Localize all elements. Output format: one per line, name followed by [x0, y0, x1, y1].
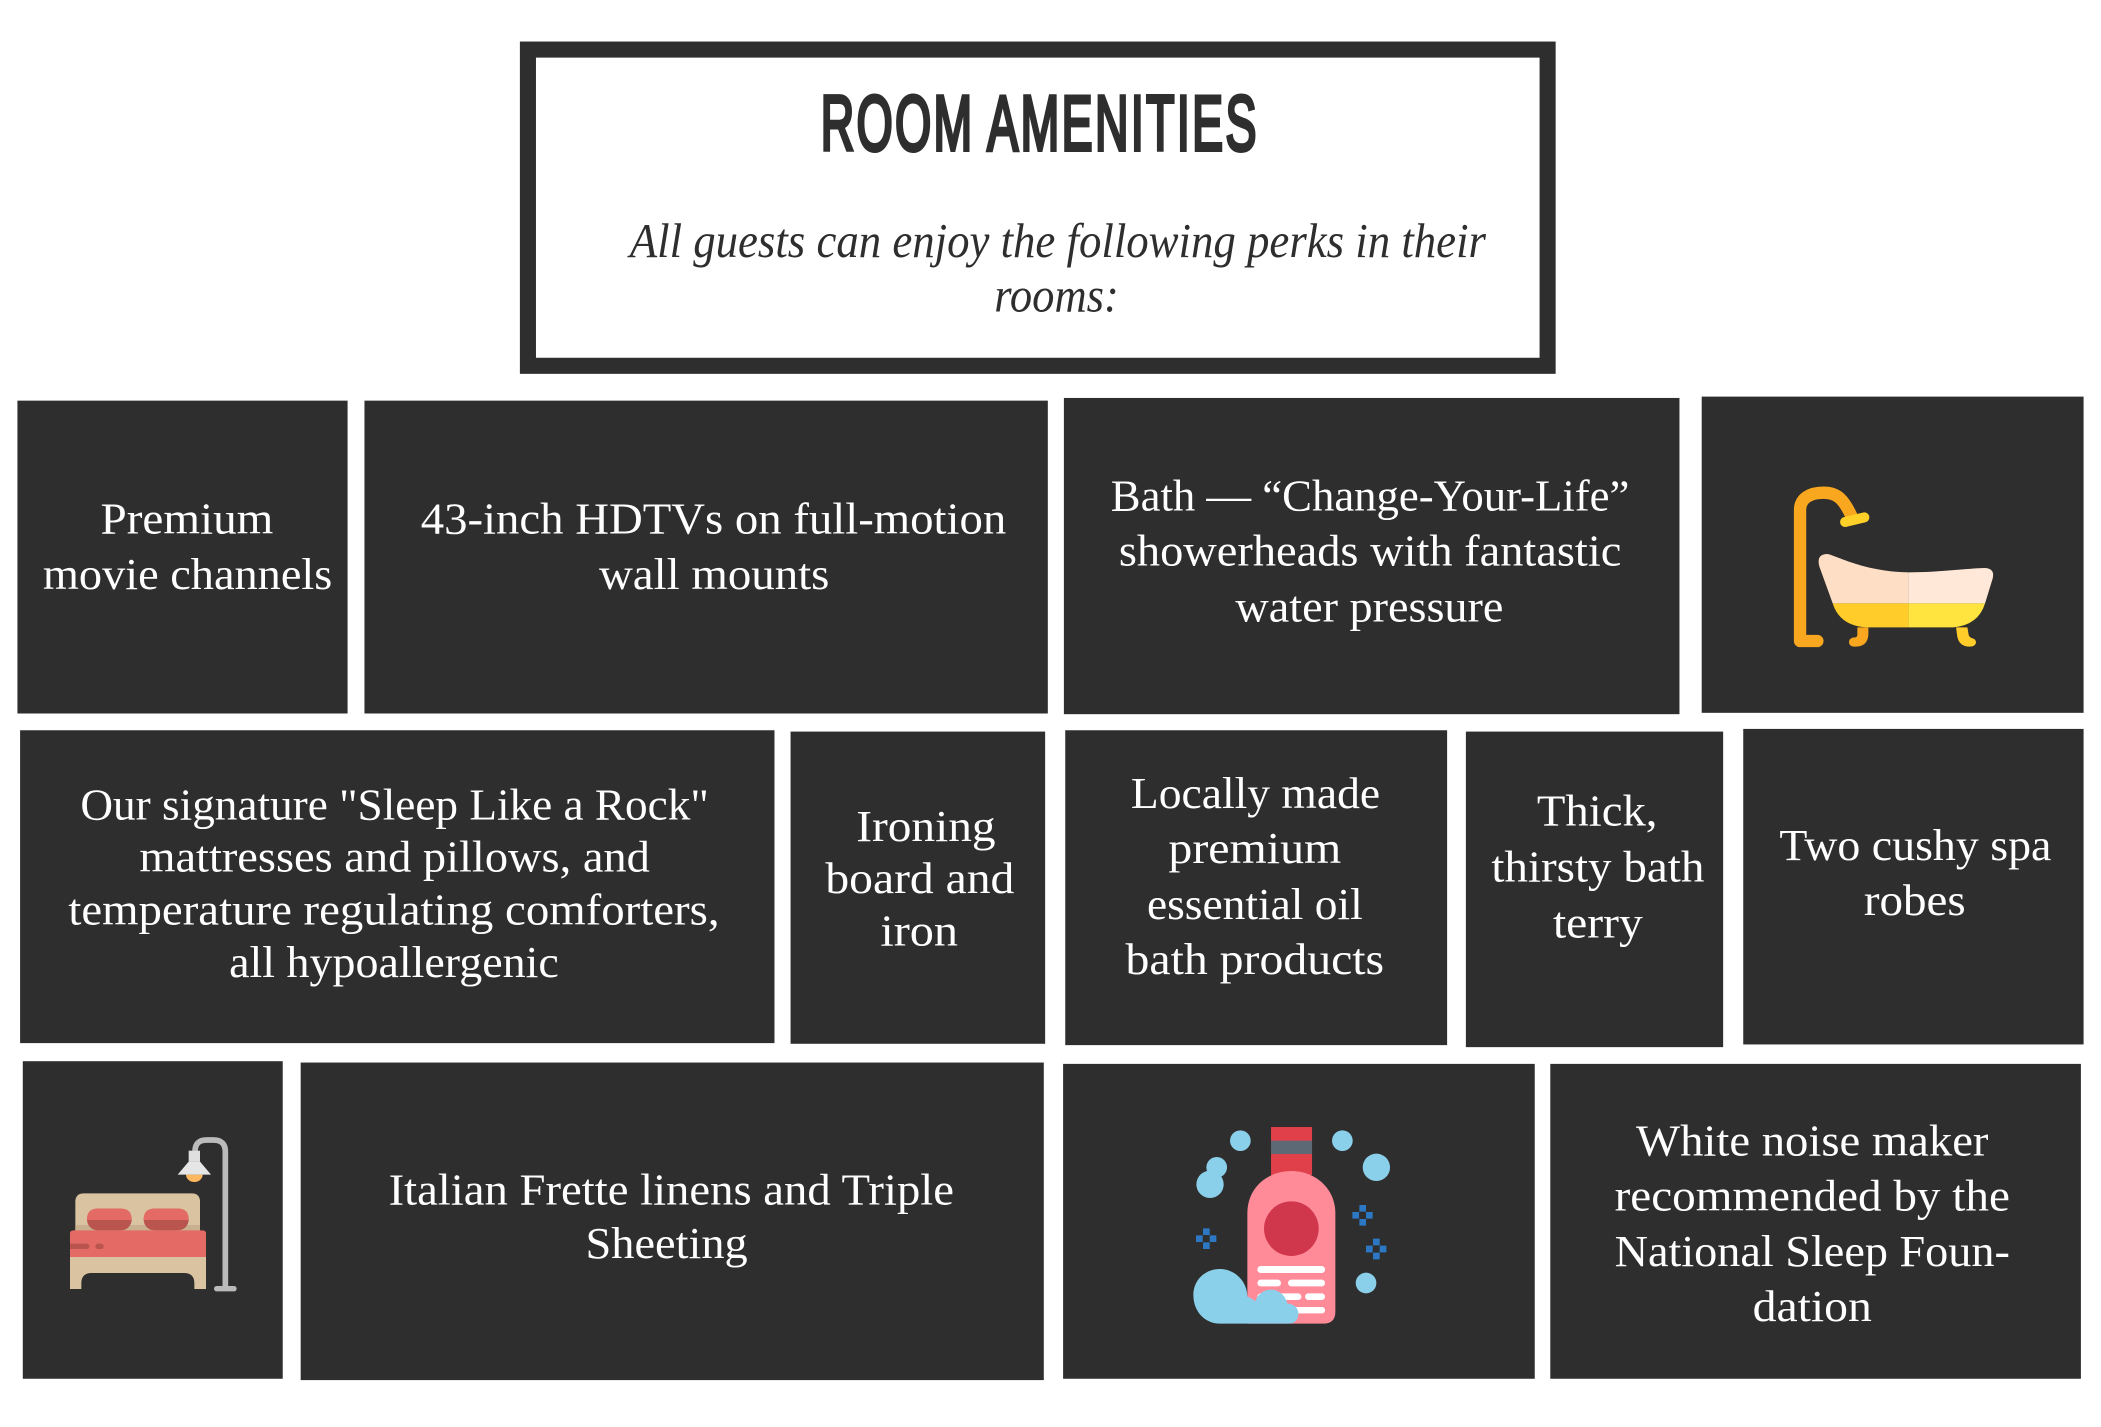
panel: HDTVs: wall mounts: [599, 550, 829, 599]
panel: bath products: bath products: [1126, 935, 1384, 984]
subtitle: All guests can enjoy the following perks in their: [627, 215, 1486, 268]
icon: bath bottle and bubbles: [1193, 1127, 1390, 1324]
panel: spa robes: [1743, 729, 2084, 1044]
panel: bath showerheads: [1064, 398, 1679, 714]
panel: white noise maker: recommended by the: [1615, 1171, 2010, 1220]
panel: bath showerheads: Bath — “Change-Your-Life”: [1111, 472, 1629, 521]
panel: signature mattresses: all hypoallergenic: [229, 938, 559, 987]
panel: signature mattresses: [20, 730, 774, 1043]
panel: ironing board: [791, 732, 1045, 1044]
panel: premium movie channels: Premium: [100, 494, 273, 543]
panel: HDTVs: 43-inch HDTVs on full-motion: [421, 494, 1006, 543]
panel: bath terry: Thick,: [1537, 786, 1657, 835]
panel: spa robes: robes: [1864, 876, 1966, 925]
panel: bathtub icon: [1702, 397, 2084, 713]
panel: white noise maker: National Sleep Foun-: [1615, 1227, 2010, 1276]
panel: premium movie channels: movie channels: [43, 550, 332, 599]
panel: white noise maker: dation: [1753, 1282, 1872, 1331]
panel: bath showerheads: showerheads with fantastic: [1119, 526, 1621, 575]
panel: Italian linens: [301, 1063, 1044, 1380]
panel: premium movie channels: [17, 401, 348, 714]
panel: ironing board: Ironing: [856, 802, 996, 851]
panel: bath terry: thirsty bath: [1491, 843, 1704, 892]
panel: bath terry: terry: [1553, 898, 1643, 947]
panel: white noise maker: [1550, 1064, 2081, 1379]
panel: signature mattresses: Our signature "Sleep Like a Rock": [80, 780, 709, 829]
panel: ironing board: iron: [880, 906, 958, 955]
title panel: [528, 50, 1548, 366]
panel: signature mattresses: temperature regulating comforters,: [68, 886, 720, 935]
subtitle: rooms:: [994, 270, 1119, 323]
panel: bath showerheads: water pressure: [1235, 583, 1503, 632]
panel: spa robes: Two cushy spa: [1779, 821, 2052, 870]
panel: white noise maker: White noise maker: [1636, 1117, 1989, 1166]
panel: Italian linens: Sheeting: [586, 1219, 748, 1268]
panel: HDTVs: [364, 401, 1048, 714]
panel: bath products: premium: [1168, 824, 1341, 873]
panel: ironing board: board and: [825, 854, 1014, 903]
panel: Italian linens: Italian Frette linens and Triple: [389, 1166, 954, 1215]
icon: bed and lamp: [70, 1140, 234, 1289]
panel: bed icon: [23, 1061, 283, 1379]
panel: bath products: Locally made: [1131, 769, 1380, 818]
icon: bathtub and shower: [1800, 493, 1993, 647]
panel: bath products: essential oil: [1147, 880, 1363, 929]
panel: signature mattresses: mattresses and pillows, and: [139, 832, 650, 881]
panel: bath terry: [1466, 732, 1723, 1047]
subtitle: [627, 215, 1486, 323]
panel: bath products: [1065, 730, 1447, 1045]
panel: bottle icon: [1063, 1064, 1535, 1379]
heading: ROOM AMENITIES: [821, 81, 1259, 167]
